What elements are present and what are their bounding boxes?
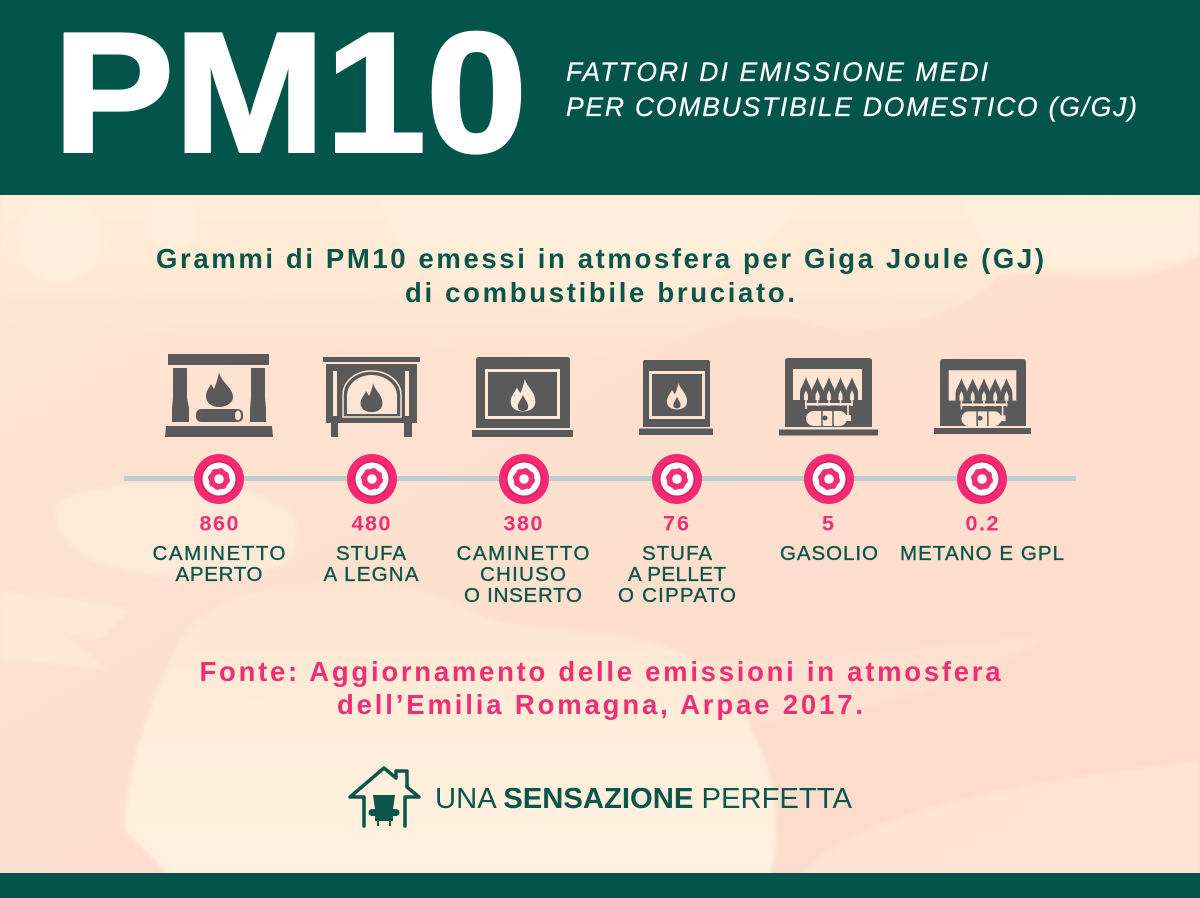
icon: caminetto chiuso bbox=[472, 357, 573, 437]
values: 860 bbox=[200, 512, 239, 536]
source note bbox=[200, 656, 1001, 720]
icon: stufa a legna bbox=[323, 357, 420, 437]
values: 5 bbox=[822, 512, 834, 536]
labels: A LEGNA bbox=[324, 563, 419, 586]
marker 2 bbox=[347, 454, 397, 504]
footer band bbox=[0, 873, 1200, 898]
labels: STUFA bbox=[642, 542, 712, 565]
title: PM10: PM10 bbox=[53, 0, 527, 188]
source note: Fonte: Aggiornamento delle emissioni in atmosfera bbox=[200, 656, 1001, 687]
heading bbox=[156, 243, 1044, 308]
heading: di combustibile bruciato. bbox=[405, 277, 795, 308]
labels: APERTO bbox=[176, 563, 262, 586]
icon: metano e gpl bbox=[934, 359, 1031, 434]
values: 480 bbox=[352, 512, 391, 536]
icon: caminetto aperto bbox=[165, 354, 273, 437]
logo bbox=[350, 768, 853, 826]
icon: gasolio bbox=[779, 358, 878, 436]
labels: CAMINETTO bbox=[456, 542, 590, 565]
values: 76 bbox=[663, 512, 689, 536]
labels bbox=[152, 542, 1064, 607]
labels: STUFA bbox=[336, 542, 406, 565]
marker 5 bbox=[804, 454, 854, 504]
marker 6 bbox=[957, 454, 1007, 504]
heading: Grammi di PM10 emessi in atmosfera per Giga Joule (GJ) bbox=[156, 243, 1044, 274]
background with soft blobs bbox=[0, 195, 1200, 875]
logo wordmark: UNA SENSAZIONE PERFETTA bbox=[435, 783, 853, 815]
labels: CHIUSO bbox=[480, 563, 566, 586]
subtitle bbox=[566, 57, 1137, 122]
subtitle: FATTORI DI EMISSIONE MEDI bbox=[566, 57, 989, 87]
marker 1 bbox=[194, 454, 244, 504]
header band bbox=[0, 0, 1200, 195]
source note: dell’Emilia Romagna, Arpae 2017. bbox=[337, 689, 863, 720]
values: 380 bbox=[504, 512, 543, 536]
labels: CAMINETTO bbox=[152, 542, 286, 565]
icon: house with armchair bbox=[350, 768, 419, 826]
subtitle: PER COMBUSTIBILE DOMESTICO (G/GJ) bbox=[566, 92, 1137, 122]
labels: A PELLET bbox=[628, 563, 726, 586]
icon: stufa a pellet bbox=[639, 360, 713, 435]
labels: GASOLIO bbox=[780, 542, 878, 565]
values bbox=[200, 512, 999, 536]
labels: METANO E GPL bbox=[900, 542, 1064, 565]
labels: O CIPPATO bbox=[618, 584, 736, 607]
marker 3 bbox=[499, 454, 549, 504]
timeline line bbox=[124, 476, 1076, 481]
values: 0.2 bbox=[966, 512, 999, 536]
labels: O INSERTO bbox=[464, 584, 582, 607]
marker 4 bbox=[652, 454, 702, 504]
